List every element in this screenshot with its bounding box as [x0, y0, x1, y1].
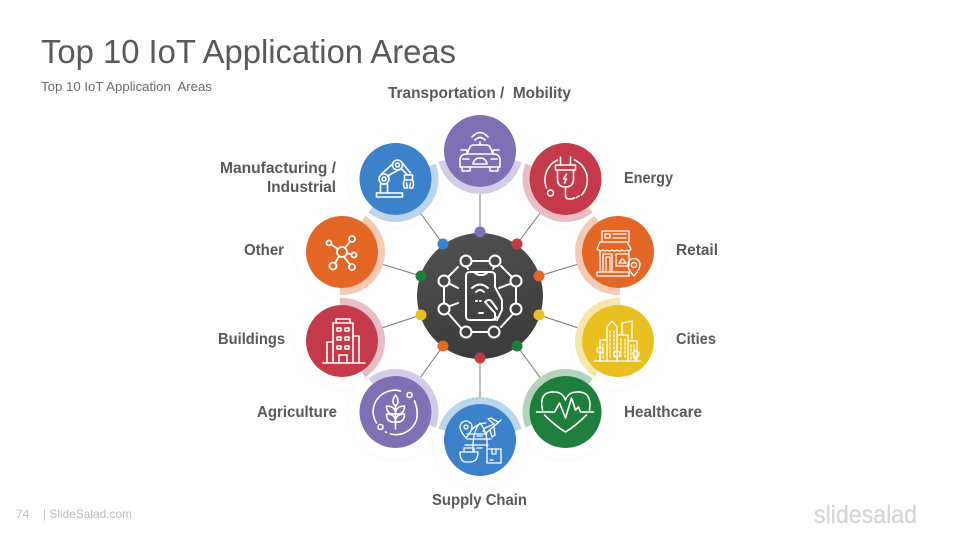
icon: connected car [460, 132, 500, 171]
icon: office building [323, 319, 365, 363]
label: manufacturing / industrial: Manufacturing / [220, 160, 337, 177]
label: transportation / mobility: Transportation / Mobility [388, 85, 571, 102]
node: cities [563, 286, 673, 396]
icon: city skyline [594, 321, 640, 361]
white halos behind the nodes [295, 104, 665, 487]
label: healthcare: Healthcare [624, 404, 702, 421]
footer: site name: | SlideSalad.com [43, 507, 132, 521]
label: manufacturing / industrial [220, 160, 337, 196]
subtitle: Top 10 IoT Application Areas [41, 80, 212, 94]
node: energy [510, 123, 621, 235]
node: retail [576, 210, 660, 294]
label: other: Other [244, 242, 284, 259]
node: buildings [300, 299, 384, 383]
logo: slidesalad: slidesalad [814, 501, 917, 529]
icon: heart with pulse [536, 392, 594, 432]
central hub [417, 233, 543, 359]
footer: page number: 74 [16, 507, 30, 521]
icon: plug [545, 157, 587, 199]
node: manufacturing / industrial [344, 128, 447, 230]
label: agriculture: Agriculture [257, 404, 337, 421]
node: agriculture [340, 356, 451, 468]
connector lines [342, 151, 618, 440]
node: healthcare [514, 361, 617, 463]
icon: network [326, 236, 356, 270]
label: cities: Cities [676, 331, 716, 348]
node: supply chain [432, 392, 528, 488]
icon: globe with logistics [460, 418, 501, 463]
label: supply chain: Supply Chain [432, 492, 527, 509]
title: Top 10 IoT Application Areas [41, 33, 456, 70]
icon: store [597, 231, 640, 276]
icon: robot arm [376, 160, 414, 197]
label: buildings: Buildings [218, 331, 285, 348]
hub connector dots [416, 226, 544, 364]
label: retail: Retail [676, 242, 718, 259]
icon: phone with network [438, 256, 522, 338]
label: manufacturing / industrial: Industrial [267, 179, 336, 196]
node: other [287, 197, 397, 307]
icon: wheat [373, 390, 417, 435]
label: energy: Energy [624, 170, 673, 187]
node: transportation / mobility [432, 103, 528, 199]
